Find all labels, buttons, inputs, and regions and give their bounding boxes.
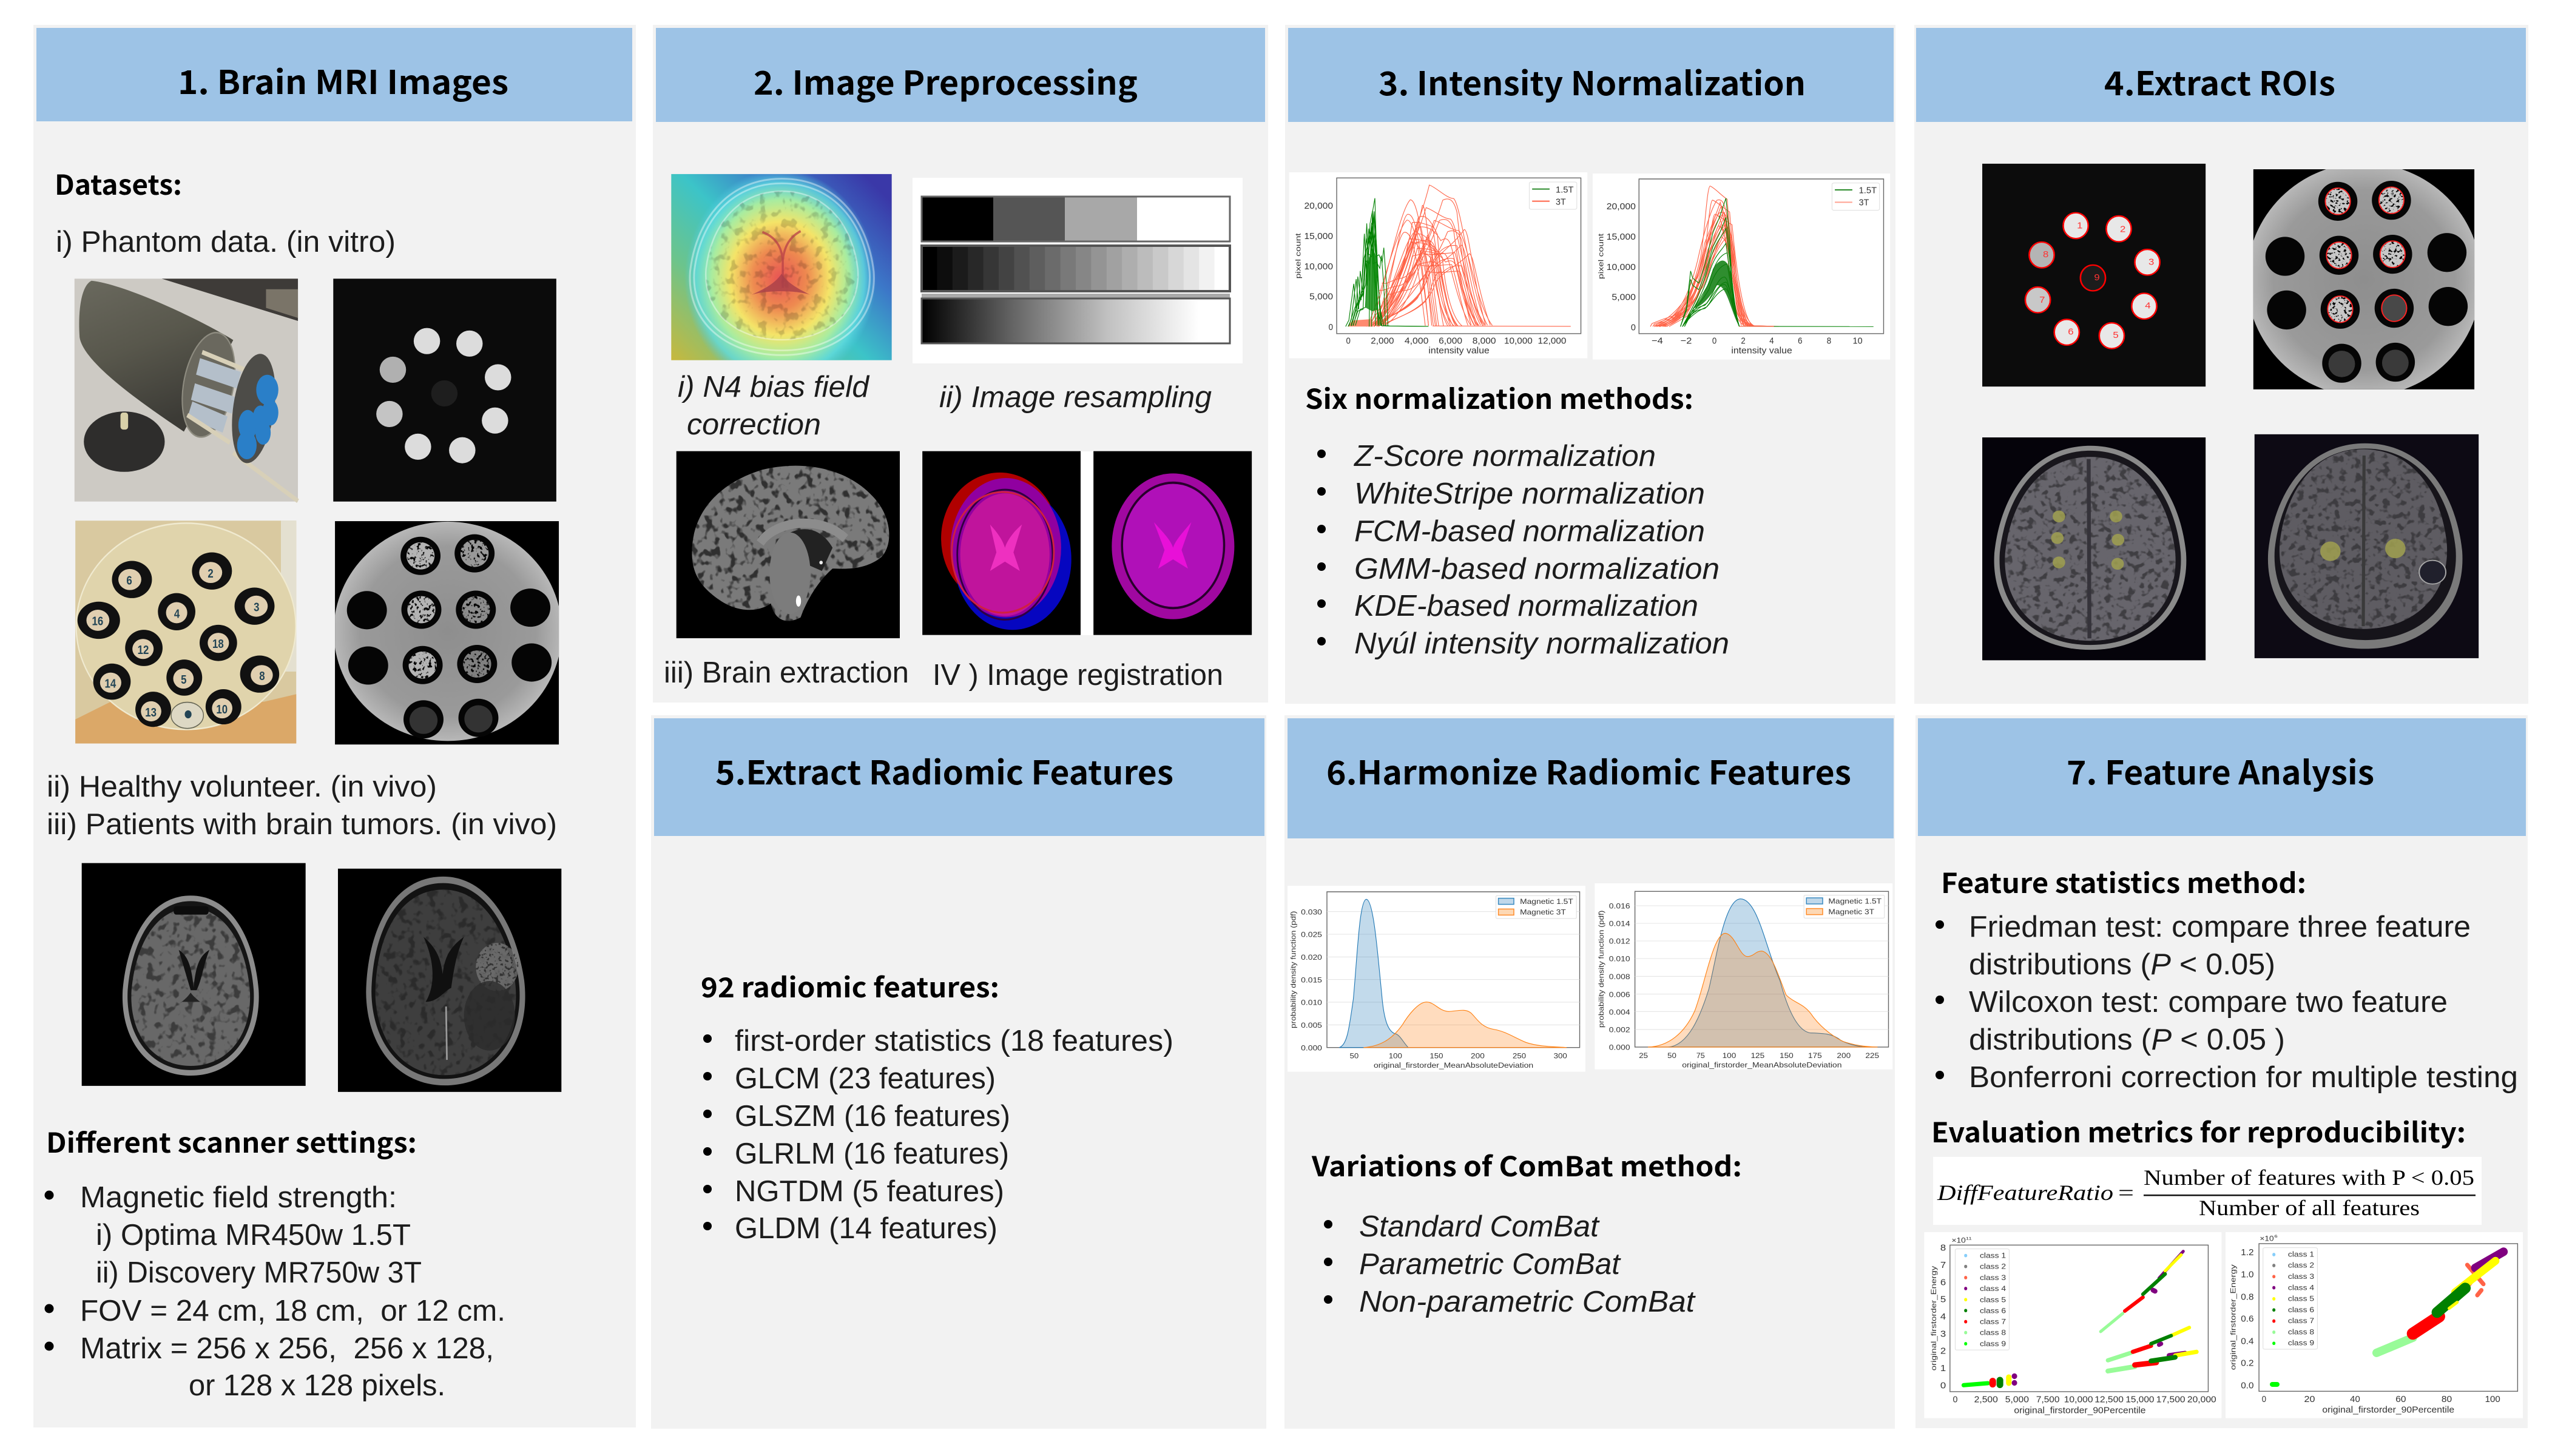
legend: class 6	[2288, 1306, 2314, 1314]
caption: N4 bias field correction: i) N4 bias field	[678, 371, 870, 403]
axis labels: 0.6	[2241, 1314, 2253, 1324]
header: Intensity Normalization	[1288, 28, 1894, 122]
axis labels	[1289, 908, 1567, 1070]
image: phantom ROI circles: 8	[2043, 250, 2048, 260]
axis labels: 0.000	[1609, 1044, 1630, 1052]
image: registration before	[922, 451, 1081, 635]
axis labels: 0.2	[2241, 1358, 2253, 1368]
list: normalization methods	[1317, 440, 1729, 660]
formula: DiffFeatureRatio: Number of all features	[2199, 1196, 2420, 1220]
axis labels: 2	[1940, 1346, 1946, 1356]
legend: 1.5T	[1556, 184, 1573, 195]
legend: class 4	[1980, 1285, 2006, 1293]
header: Extract ROIs	[1916, 28, 2526, 122]
axis labels: 4,000	[1405, 335, 1428, 346]
axis labels: intensity value	[1731, 345, 1792, 356]
axis labels: 250	[1513, 1053, 1526, 1060]
axis labels	[2229, 1235, 2500, 1415]
image: phantom ROI circles	[1982, 164, 2206, 386]
axis labels: 0.005	[1301, 1022, 1322, 1030]
chart: scatter after normalization	[2226, 1232, 2523, 1418]
header: Harmonize Radiomic Features	[1288, 718, 1894, 838]
chart: intensity histogram after normalization	[1593, 174, 1890, 360]
legend: class 2	[1980, 1262, 2006, 1271]
axis labels: 20	[2304, 1394, 2315, 1404]
axis labels: 20,000	[1304, 201, 1333, 211]
image: phantom ROI circles: 2	[2120, 224, 2125, 234]
list: normalization methods: Z-Score normalization	[1354, 440, 1656, 473]
axis labels: 60	[2395, 1394, 2406, 1404]
image: phantom plate photo: 14	[105, 676, 116, 690]
axis labels: 15,000	[1304, 231, 1333, 241]
header: Brain MRI Images: 1. Brain MRI Images	[178, 56, 508, 104]
axis labels	[1598, 902, 1879, 1069]
header: Image Preprocessing	[656, 28, 1265, 122]
axis labels: 0.002	[1609, 1026, 1630, 1034]
legend: Magnetic 1.5T	[1828, 897, 1882, 905]
axis labels: 15,000	[1607, 232, 1636, 242]
caption: image registration: IV ) Image registration	[933, 659, 1223, 692]
header: Extract Radiomic Features	[654, 718, 1264, 836]
image: tumor brain MRI	[338, 869, 561, 1092]
legend: class 9	[1980, 1340, 2006, 1348]
legend: 3T	[1556, 197, 1566, 207]
image: sagittal brain extraction	[677, 451, 900, 638]
image: phantom plate photo: 6	[126, 573, 132, 587]
axis labels: 0.015	[1301, 976, 1322, 984]
axis labels: probability density function (pdf)	[1598, 911, 1606, 1028]
legend: class 7	[2288, 1317, 2314, 1325]
image: phantom plate photo: 3	[254, 600, 259, 614]
axis labels: 6	[1940, 1278, 1946, 1287]
image: plate ROI circles	[2253, 169, 2474, 389]
formula: DiffFeatureRatio: DiffFeatureRatio	[1937, 1181, 2113, 1205]
axis labels: 15,000	[2125, 1395, 2154, 1404]
list: scanner settings	[45, 1181, 505, 1402]
chart: density before ComBat	[1288, 886, 1585, 1072]
axis labels: 0.016	[1609, 902, 1630, 910]
text: healthy volunteer: ii) Healthy volunteer. (in vivo)	[47, 770, 437, 803]
image: phantom ROI circles: 7	[2039, 295, 2045, 305]
image: phantom plate photo: 5	[181, 673, 186, 686]
axis labels: 40	[2350, 1394, 2360, 1404]
axis labels: 0.012	[1609, 938, 1630, 946]
image: phantom plate photo: 2	[208, 567, 214, 580]
axis labels: original_firstorder_90Percentile	[2014, 1406, 2146, 1415]
heading: Datasets: Datasets:	[55, 163, 182, 203]
image: healthy brain MRI	[82, 863, 306, 1086]
axis labels: 12,500	[2094, 1395, 2124, 1404]
image: phantom plate photo: 8	[259, 669, 265, 682]
image: tumor brain with ROIs	[2255, 434, 2479, 658]
image: phantom plate photo: 16	[92, 614, 103, 628]
axis labels: pixel count	[1294, 233, 1303, 278]
list: scanner settings: Matrix = 256 x 256, 256 x 128,	[80, 1332, 494, 1365]
axis labels: 8	[1940, 1243, 1946, 1253]
legend: class 2	[2288, 1261, 2314, 1270]
axis labels: pixel count	[1597, 233, 1605, 279]
axis labels: 80	[2442, 1394, 2452, 1404]
legend: class 3	[2288, 1273, 2314, 1281]
list: scanner settings: Magnetic field strength:	[80, 1181, 397, 1214]
legend: class 5	[1980, 1296, 2006, 1304]
caption: brain extraction: iii) Brain extraction	[664, 656, 909, 689]
axis labels: 0	[1953, 1395, 1957, 1404]
axis labels: 150	[1780, 1052, 1794, 1060]
axis labels: original_firstorder_Energy	[1930, 1266, 1939, 1370]
axis labels: 100	[2485, 1394, 2500, 1404]
image: phantom plate photo: 12	[138, 643, 149, 656]
list: feature classes: GLCM (23 features)	[735, 1062, 996, 1095]
text: phantom data: i) Phantom data. (in vitro)	[56, 226, 396, 258]
axis labels: 0.014	[1609, 920, 1630, 928]
axis labels: 125	[1750, 1052, 1764, 1060]
list: statistics methods: Friedman test: compare three feature	[1969, 911, 2471, 943]
list: scanner settings: ii) Discovery MR750w 3T	[96, 1256, 422, 1289]
axis labels: 0.004	[1609, 1008, 1630, 1016]
axis labels: 17,500	[2156, 1395, 2185, 1404]
legend: class 6	[1980, 1307, 2006, 1315]
heading: different scanner settings: Different scanner settings:	[46, 1121, 417, 1161]
axis labels: 5,000	[2005, 1395, 2029, 1404]
axis labels: 0.0	[2241, 1381, 2253, 1390]
legend: class 3	[1980, 1274, 2006, 1282]
list: scanner settings: FOV = 24 cm, 18 cm, or 12 cm.	[80, 1295, 505, 1327]
list: feature classes: GLDM (14 features)	[735, 1212, 997, 1245]
legend: Magnetic 1.5T	[1520, 898, 1573, 906]
legend	[1529, 182, 1577, 209]
list: ComBat variations: Parametric ComBat	[1359, 1248, 1621, 1281]
chart: intensity histogram before normalization	[1289, 172, 1587, 359]
caption: N4 bias field correction	[678, 371, 870, 441]
axis labels: intensity value	[1428, 345, 1490, 356]
axis labels: 225	[1865, 1052, 1879, 1060]
axis labels: 0.030	[1301, 908, 1322, 916]
axis labels: 2	[1741, 335, 1746, 346]
list: statistics methods: distributions (P < 0.05)	[1969, 948, 2275, 981]
axis labels: 5,000	[1309, 291, 1333, 302]
caption: image resampling: ii) Image resampling	[939, 381, 1212, 414]
list: statistics methods: Bonferroni correction for multiple testing	[1969, 1061, 2518, 1094]
axis labels: 0.000	[1301, 1044, 1322, 1052]
header: Extract ROIs: 4.Extract ROIs	[2104, 57, 2335, 105]
axis labels: 6	[1798, 335, 1803, 346]
axis labels: −2	[1681, 335, 1692, 346]
axis labels: 0.010	[1609, 956, 1630, 963]
chart: density after ComBat	[1595, 883, 1892, 1070]
axis labels: 12,000	[1538, 335, 1566, 346]
axis labels: 2,000	[1371, 335, 1394, 346]
axis labels: 7,500	[2036, 1395, 2059, 1404]
image: phantom plate MR slice	[334, 521, 562, 744]
panel: 2. Image Preprocessing	[653, 25, 1268, 703]
image: healthy brain with ROIs	[1982, 437, 2206, 660]
image: phantom ROI circles: 5	[2113, 331, 2119, 340]
list: normalization methods: GMM-based normalization	[1354, 553, 1720, 585]
header: Intensity Normalization: 3. Intensity Normalization	[1379, 57, 1806, 105]
axis labels: 0.025	[1301, 931, 1322, 939]
axis labels: 4	[1769, 335, 1774, 346]
legend: Magnetic 3T	[1520, 909, 1566, 917]
image: phantom ROI circles: 6	[2068, 327, 2074, 337]
legend	[1955, 1249, 2009, 1350]
heading: evaluation metrics: Evaluation metrics for reproducibility:	[1931, 1111, 2466, 1150]
axis labels: 2,500	[1974, 1395, 1998, 1404]
axis labels: 50	[1349, 1053, 1359, 1060]
caption: N4 bias field correction: correction	[687, 408, 821, 441]
legend	[2263, 1248, 2317, 1349]
axis labels: 10,000	[2064, 1395, 2093, 1404]
image: image resampling gradient bars	[913, 178, 1243, 363]
legend: class 9	[2288, 1339, 2314, 1347]
axis labels: 0.008	[1609, 973, 1630, 981]
panel: 5. Extract Radiomic Features	[651, 715, 1266, 1429]
axis labels: 100	[1389, 1053, 1402, 1060]
image: phantom plate photo: 10	[216, 702, 228, 716]
list: ComBat variations: Standard ComBat	[1359, 1210, 1600, 1243]
panel: 6. Harmonize Radiomic Features	[1284, 715, 1895, 1429]
axis labels: 200	[1471, 1053, 1485, 1060]
list: normalization methods: Nyúl intensity normalization	[1354, 627, 1729, 660]
axis labels: 8,000	[1473, 335, 1496, 346]
axis labels: 50	[1667, 1052, 1676, 1060]
axis labels: 150	[1429, 1053, 1443, 1060]
axis labels: original_firstorder_Energy	[2229, 1264, 2238, 1370]
list: feature classes	[703, 1025, 1173, 1245]
list: statistics methods: Wilcoxon test: compare two feature	[1969, 986, 2448, 1019]
list: ComBat variations	[1324, 1210, 1696, 1318]
image: phantom cylinder photo	[75, 278, 298, 502]
divider: white gap	[1081, 451, 1093, 635]
axis labels: 0	[1631, 322, 1636, 332]
list: normalization methods: FCM-based normalization	[1354, 515, 1705, 548]
list: feature classes: first-order statistics (18 features)	[735, 1025, 1173, 1057]
image: registration after	[1093, 451, 1252, 635]
list: feature classes: NGTDM (5 features)	[735, 1175, 1004, 1208]
legend: class 1	[1980, 1252, 2006, 1260]
legend	[1832, 183, 1880, 211]
image: phantom ROI circles: 3	[2148, 257, 2155, 267]
axis labels: 10,000	[1304, 261, 1333, 272]
axis labels: 6,000	[1439, 335, 1462, 346]
heading: variations of ComBat: Variations of ComBat method:	[1311, 1145, 1742, 1184]
heading: six normalization methods: Six normalization methods:	[1305, 377, 1693, 417]
image: phantom MR slice	[333, 278, 556, 502]
image: phantom ROI circles: 1	[2077, 221, 2083, 231]
axis labels: −4	[1652, 335, 1663, 346]
panel: 7. Feature Analysis	[1915, 715, 2528, 1428]
axis labels: 0.010	[1301, 999, 1322, 1007]
chart: intensity histogram after normalization: 10	[1853, 335, 1863, 346]
axis labels: 300	[1554, 1053, 1567, 1060]
axis labels: 0.020	[1301, 954, 1322, 962]
image: phantom plate photo: 4	[174, 607, 180, 621]
axis labels: ×10	[2260, 1235, 2274, 1243]
header: Feature Analysis: 7. Feature Analysis	[2067, 746, 2374, 794]
axis labels: 7	[1940, 1260, 1946, 1270]
axis labels: 20,000	[1607, 201, 1636, 212]
axis labels	[1294, 201, 1566, 356]
image: phantom plate photo	[75, 521, 296, 744]
axis labels: original_firstorder_MeanAbsoluteDeviation	[1682, 1061, 1841, 1069]
heading: 92 radiomic features: 92 radiomic features:	[701, 966, 999, 1005]
axis labels: 0	[1346, 335, 1351, 346]
axis labels: 0.4	[2241, 1336, 2253, 1346]
axis labels: 1.0	[2241, 1270, 2253, 1279]
axis labels: 0	[1940, 1381, 1946, 1390]
axis labels: 20,000	[2187, 1395, 2216, 1404]
axis labels: 1	[1940, 1363, 1946, 1373]
image: phantom ROI circles: 9	[2094, 273, 2100, 283]
legend: class 5	[2288, 1295, 2314, 1303]
list: normalization methods: WhiteStripe normalization	[1354, 477, 1705, 510]
axis labels	[1597, 201, 1863, 356]
axis labels: 0	[1712, 335, 1716, 346]
legend: class 8	[1980, 1329, 2006, 1337]
header: Feature Analysis	[1918, 718, 2526, 836]
axis labels: 1.2	[2241, 1247, 2253, 1258]
formula: DiffFeatureRatio: Number of features with P < 0.05	[2144, 1165, 2474, 1190]
panel: 4. Extract ROIs	[1914, 25, 2528, 704]
axis labels: 5	[1940, 1295, 1946, 1304]
header: Brain MRI Images	[36, 28, 632, 121]
axis labels: 4	[1940, 1312, 1946, 1322]
axis labels: 175	[1808, 1052, 1822, 1060]
list: scanner settings: or 128 x 128 pixels.	[189, 1369, 445, 1402]
header: Harmonize Radiomic Features: 6.Harmonize Radiomic Features	[1326, 746, 1851, 794]
axis labels: 3	[1940, 1329, 1946, 1339]
list: scanner settings: i) Optima MR450w 1.5T	[96, 1219, 411, 1252]
axis labels	[1930, 1236, 2216, 1415]
axis labels: 10,000	[1607, 262, 1636, 272]
legend: 1.5T	[1859, 185, 1877, 195]
axis labels: 5,000	[1612, 292, 1636, 302]
axis labels: 75	[1696, 1052, 1705, 1060]
axis labels: probability density function (pdf)	[1289, 911, 1298, 1028]
axis labels: 100	[1723, 1052, 1736, 1060]
axis labels: 0	[1329, 322, 1333, 332]
list: ComBat variations: Non-parametric ComBat	[1359, 1286, 1696, 1318]
axis labels: 11	[1966, 1236, 1972, 1241]
image: N4 bias field heat map	[671, 174, 892, 360]
panel: 3. Intensity Normalization	[1285, 25, 1895, 704]
axis labels: 0	[2262, 1394, 2266, 1404]
legend: class 7	[1980, 1318, 2006, 1326]
list: normalization methods: KDE-based normalization	[1354, 590, 1698, 622]
heading: feature statistics method: Feature statistics method:	[1941, 861, 2306, 901]
legend	[1496, 895, 1576, 918]
axis labels: 10,000	[1504, 335, 1533, 346]
list: statistics methods: distributions (P < 0.05 )	[1969, 1023, 2285, 1056]
legend: class 4	[2288, 1284, 2314, 1292]
axis labels: 0.8	[2241, 1292, 2253, 1302]
image: phantom plate photo: 13	[145, 705, 157, 719]
axis labels: ×10	[1951, 1237, 1966, 1245]
axis labels: 8	[1827, 335, 1831, 346]
axis labels: original_firstorder_MeanAbsoluteDeviation	[1374, 1062, 1533, 1070]
legend: Magnetic 3T	[1828, 908, 1874, 916]
axis labels: 25	[1639, 1052, 1648, 1060]
formula: DiffFeatureRatio: =	[2118, 1181, 2134, 1205]
legend: 3T	[1859, 197, 1869, 207]
axis labels: 200	[1837, 1052, 1851, 1060]
legend	[1804, 895, 1885, 918]
legend: class 1	[2288, 1250, 2314, 1258]
list: feature classes: GLSZM (16 features)	[735, 1100, 1010, 1133]
image: phantom plate photo: 18	[212, 637, 224, 650]
image: phantom ROI circles: 4	[2145, 301, 2151, 311]
text: patients with brain tumors: iii) Patients with brain tumors. (in vivo)	[47, 808, 557, 841]
panel: 1. Brain MRI Images	[33, 25, 636, 1427]
header: Image Preprocessing: 2. Image Preprocessing	[754, 56, 1138, 104]
header: Extract Radiomic Features: 5.Extract Radiomic Features	[715, 746, 1173, 794]
axis labels: 0.006	[1609, 991, 1630, 999]
chart: scatter before normalization	[1924, 1232, 2221, 1418]
list: statistics methods	[1936, 911, 2518, 1094]
formula: DiffFeatureRatio	[1933, 1157, 2482, 1225]
axis labels: 6	[2274, 1235, 2278, 1239]
legend: class 8	[2288, 1328, 2314, 1336]
list: feature classes: GLRLM (16 features)	[735, 1138, 1009, 1170]
